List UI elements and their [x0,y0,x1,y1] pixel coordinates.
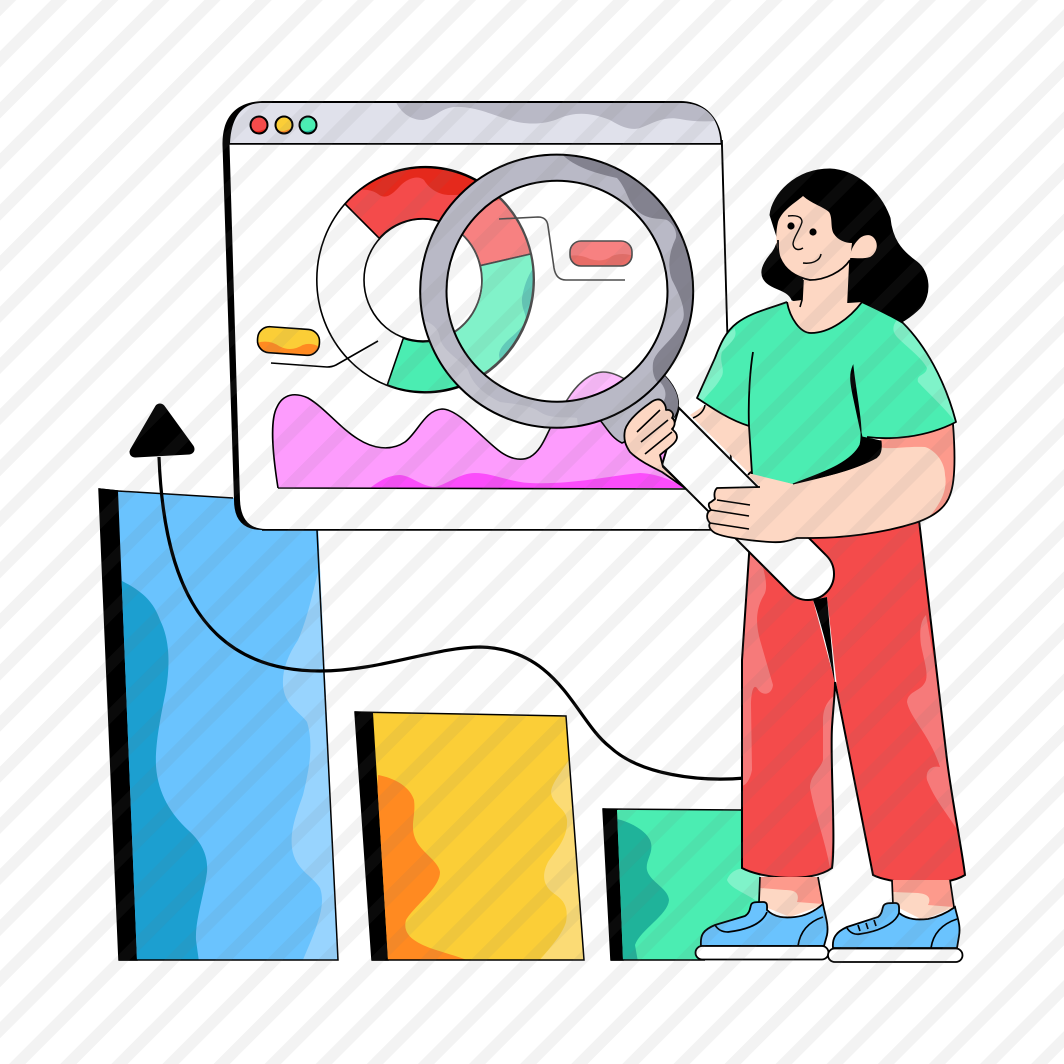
character: front arm and hand [707,424,955,542]
donut segment: green [386,253,534,392]
window control: green [299,116,317,135]
magnifier: ring [419,154,694,429]
yellow bar [355,712,590,962]
shirt fold shadow [793,366,881,484]
browser window [222,100,733,530]
shirt highlight: right sleeve [893,320,955,422]
character: hand holding magnifier [624,399,685,488]
character: trousers [742,520,965,883]
area chart [273,372,690,489]
character: right shoe [828,903,962,962]
donut chart [316,166,535,394]
callout: yellow label leader line [271,341,378,367]
growth arrow [135,409,745,779]
green bar [603,809,770,962]
magnifier: lens [446,181,668,402]
donut segment: red [340,160,531,266]
magnifier: handle socket [600,376,678,443]
character: neck [786,258,863,345]
eyebrow and nose [788,216,803,249]
character: hair [762,169,928,322]
character: face [776,196,852,280]
eyes [787,222,817,236]
character: rear arm [690,405,752,476]
trouser highlight: right leg [907,615,956,828]
blue bar [99,489,345,962]
trouser highlight: left leg [742,540,773,786]
magnifier: handle rod [662,408,834,600]
callout: red label pill [568,241,634,268]
character: left ankle [759,877,823,917]
window control: yellow [275,116,293,135]
shirt highlight: left sleeve [697,328,736,402]
trouser crease [813,597,835,684]
character: left shoe [696,902,828,960]
trouser highlight: inner leg [810,695,835,868]
character: t-shirt [697,302,956,484]
smile [803,254,821,263]
callout: red label leader line [499,217,625,280]
window control: red [250,116,268,135]
character: ear [850,235,877,258]
window title bar [229,100,725,144]
callout: yellow label pill [256,326,320,356]
character: right ankle [892,880,955,920]
